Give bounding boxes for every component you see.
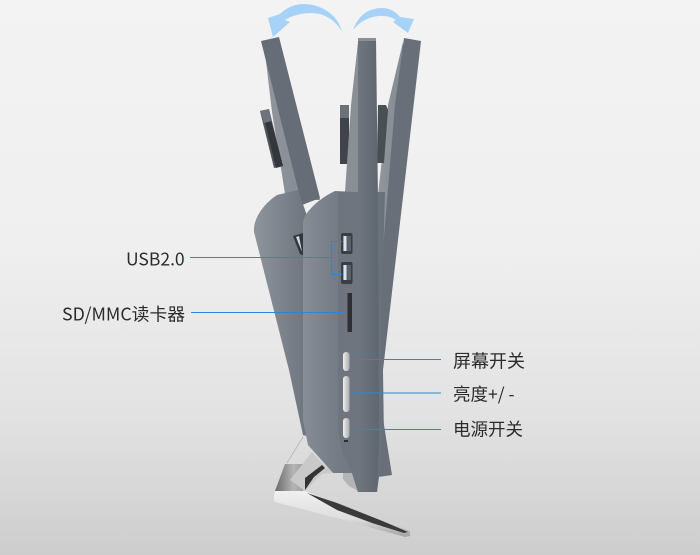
- button: screen power: [343, 352, 350, 371]
- device: front bar of middle screen: [358, 38, 379, 492]
- device: middle screen hinge: [340, 42, 358, 192]
- stand base: [274, 491, 410, 537]
- right screen hinge block: [377, 105, 388, 163]
- hinge under body: [343, 472, 358, 491]
- callout: USB2.0: [126, 242, 342, 274]
- indicator light: [344, 440, 348, 442]
- icon: arrow rotating left: [268, 4, 342, 37]
- device: left tilted position: [254, 37, 320, 440]
- device: main body: [303, 191, 385, 492]
- left screen back: [264, 39, 320, 200]
- callout: USB2.0: USB2.0: [126, 246, 185, 272]
- port: USB upper: [341, 233, 352, 254]
- stand riser: [275, 464, 312, 491]
- button: brightness: [343, 376, 350, 412]
- callout: power switch: 电源开关: [453, 416, 523, 442]
- left USB port: [293, 233, 304, 256]
- stand arm: [290, 452, 333, 491]
- left screen front bar: [261, 37, 320, 205]
- right screen back: [376, 42, 412, 340]
- button: power: [343, 418, 350, 438]
- port: USB lower: [341, 262, 352, 284]
- callout: brightness: 亮度+/ -: [453, 382, 515, 406]
- left body: [254, 190, 320, 440]
- stand: [274, 437, 410, 537]
- port: SD card slot: [348, 293, 352, 332]
- icon: arrow rotating right: [353, 8, 414, 33]
- device: right tilted screen: [376, 38, 421, 477]
- callout: SD/MMC card reader: SD/MMC读卡器: [62, 300, 185, 326]
- callout: screen switch: 屏幕开关: [453, 348, 525, 374]
- device: side panel: [338, 192, 358, 492]
- left screen hinge block: [260, 109, 283, 168]
